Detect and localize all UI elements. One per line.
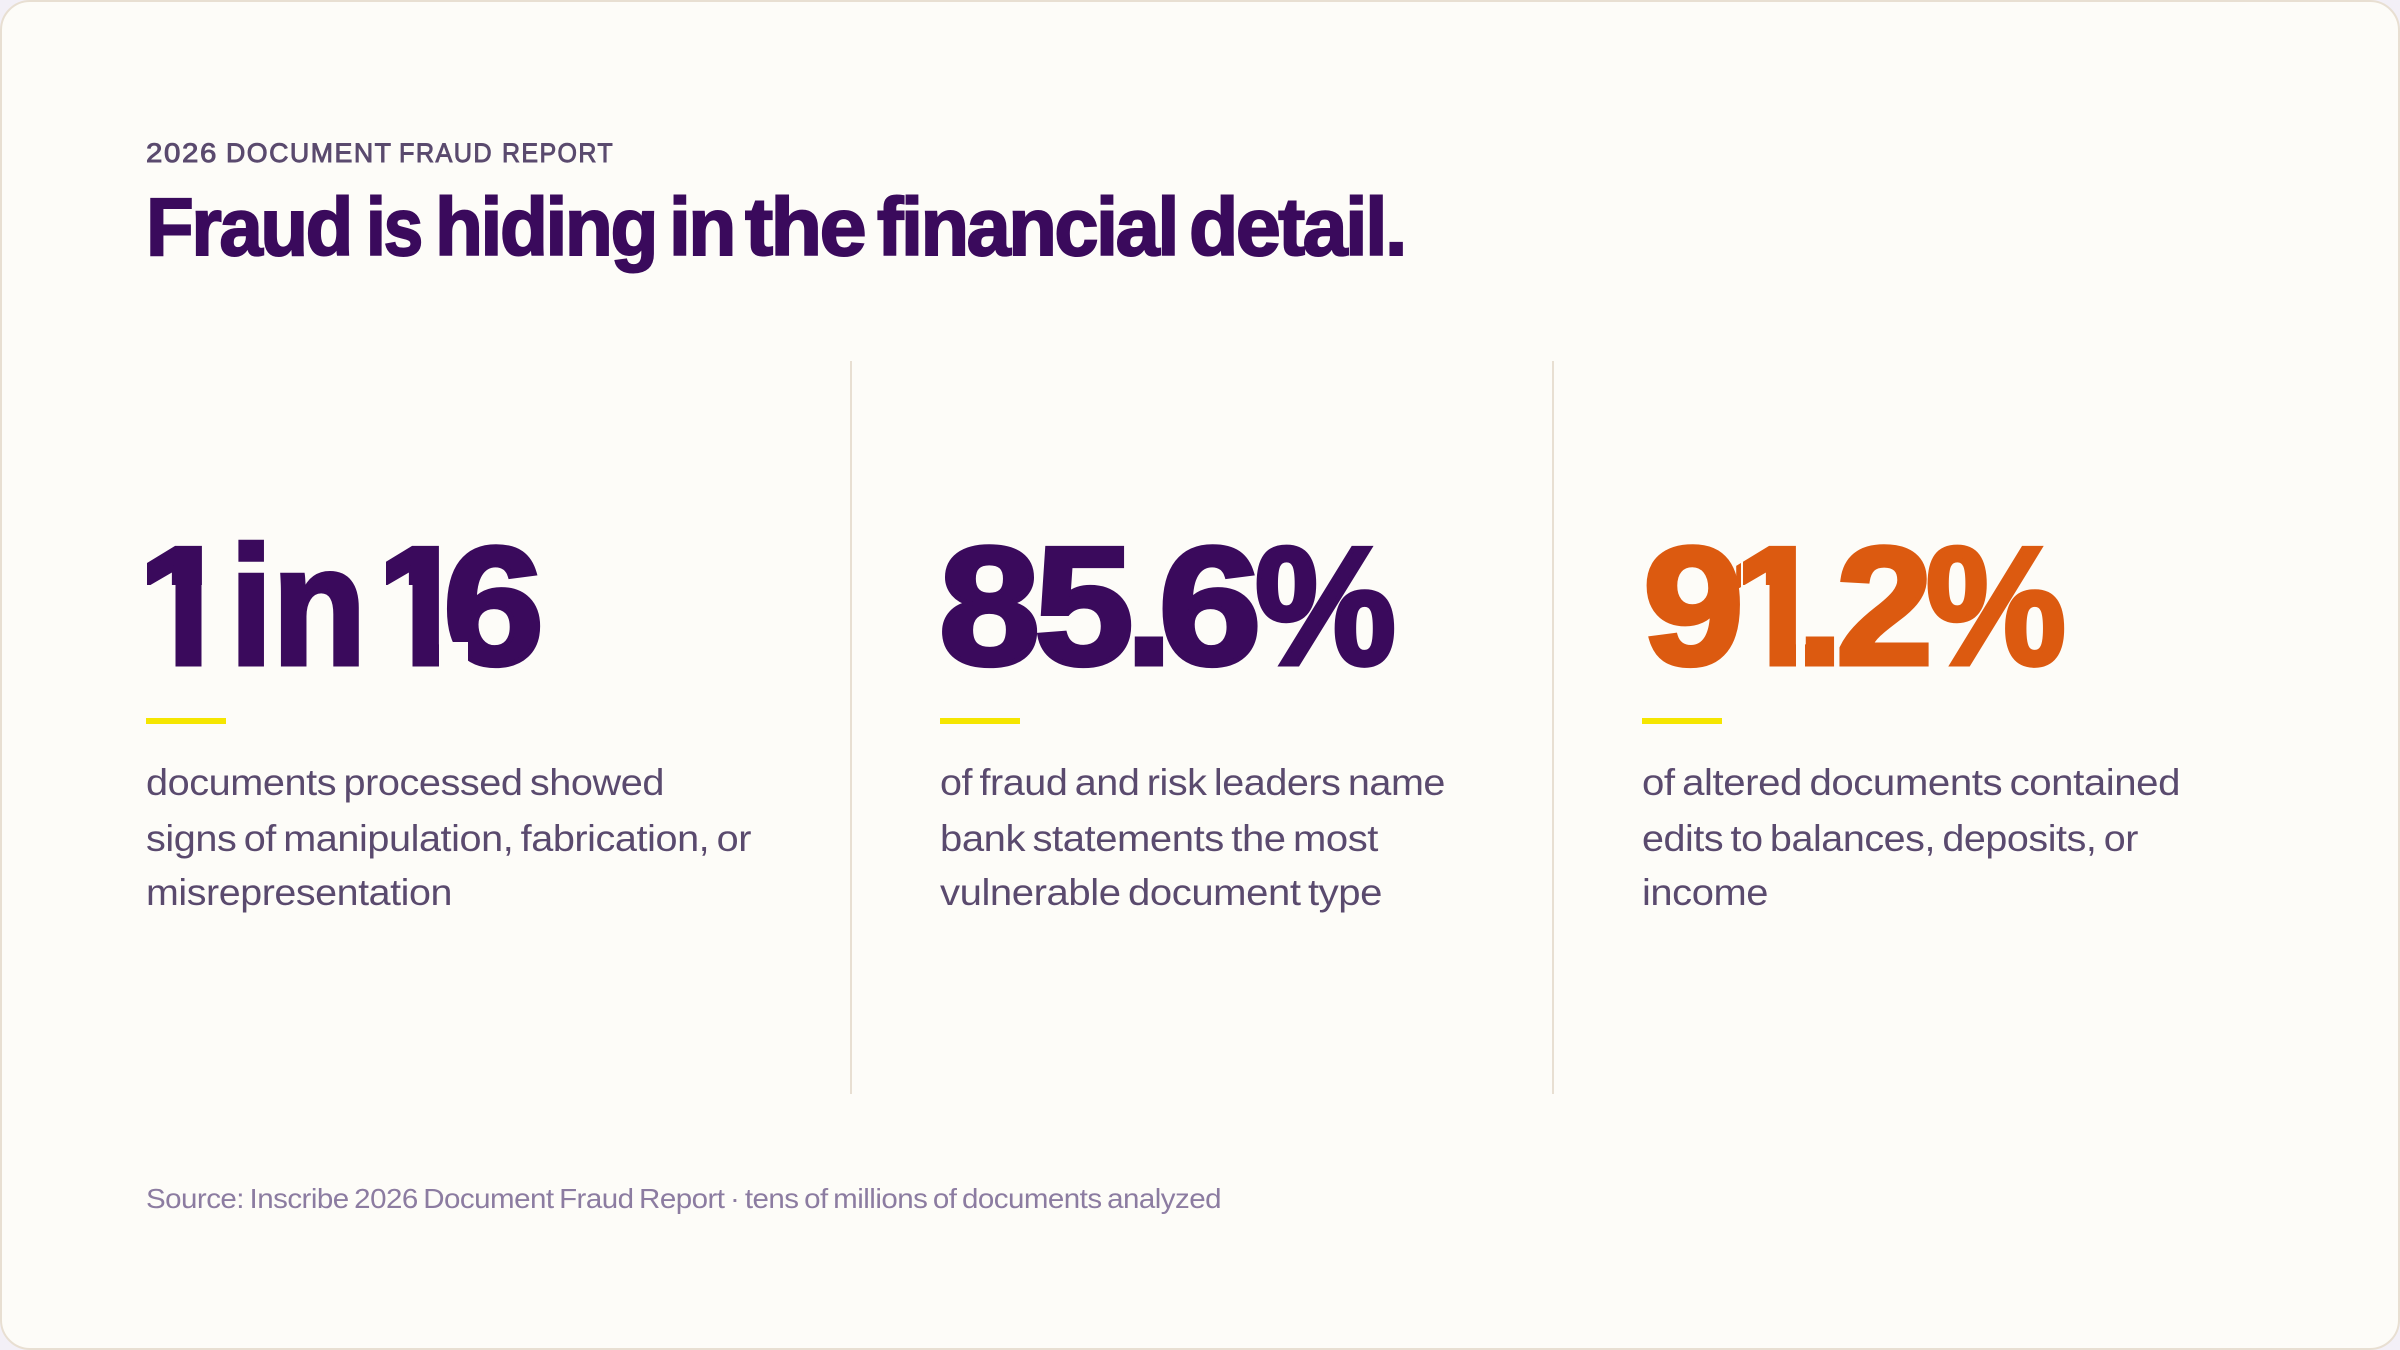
stat: 91.2%: 1 [1727,512,1827,700]
title: financial [877,182,1177,273]
accent bar [940,718,1020,724]
title: in [669,182,734,273]
description: signs of manipulation, fabrication, or [146,818,751,859]
stat: 91.2%: 2 [1836,512,1933,700]
description: of fraud and risk leaders name [940,762,1445,803]
title: is [366,182,421,273]
stat: 85.6%: 5 [1034,512,1134,700]
description: edits to balances, deposits, or [1642,818,2138,859]
eyebrow label: DOCUMENT [226,138,392,168]
description: of altered documents contained [1642,762,2180,803]
stat: 1 in 16: in [230,512,366,700]
panel: 1 in 16 [133,512,751,913]
title: detail. [1189,182,1405,273]
description [1642,762,2180,913]
title: the [745,182,864,273]
description: misrepresentation [146,872,452,913]
stat: 91.2%: 9 [1643,512,1744,700]
stat: 91.2%: % [1926,512,2066,700]
stat: 1 in 16: 6 [443,512,544,700]
description: documents processed showed [146,762,664,803]
stat: 85.6%: 8 [939,512,1040,700]
title: hiding [435,182,656,273]
accent bar [146,718,226,724]
accent bar [1642,718,1722,724]
stat: 85.6%: 6 [1158,512,1262,700]
stat: 1 in 16: 1 [370,512,470,700]
description: bank statements the most [940,818,1379,859]
eyebrow label: FRAUD [399,138,493,168]
stat: 91.2%: . [1797,512,1843,700]
stat: 85.6%: . [1126,512,1172,700]
panel: 91.2% [1642,544,2178,906]
source note: Source: Inscribe 2026 Document Fraud Report · tens of millions of documents analyzed [146,1183,1221,1214]
description [940,762,1445,913]
description: income [1642,872,1768,913]
panel: 85.6% [939,512,1445,913]
description [146,762,751,913]
stat: 85.6%: % [1255,512,1396,700]
eyebrow label: 2026 [146,138,218,168]
stat: 1 in 16: 1 [133,512,233,700]
description: vulnerable document type [940,872,1382,913]
eyebrow label: REPORT [502,138,614,168]
title: Fraud [146,182,351,273]
